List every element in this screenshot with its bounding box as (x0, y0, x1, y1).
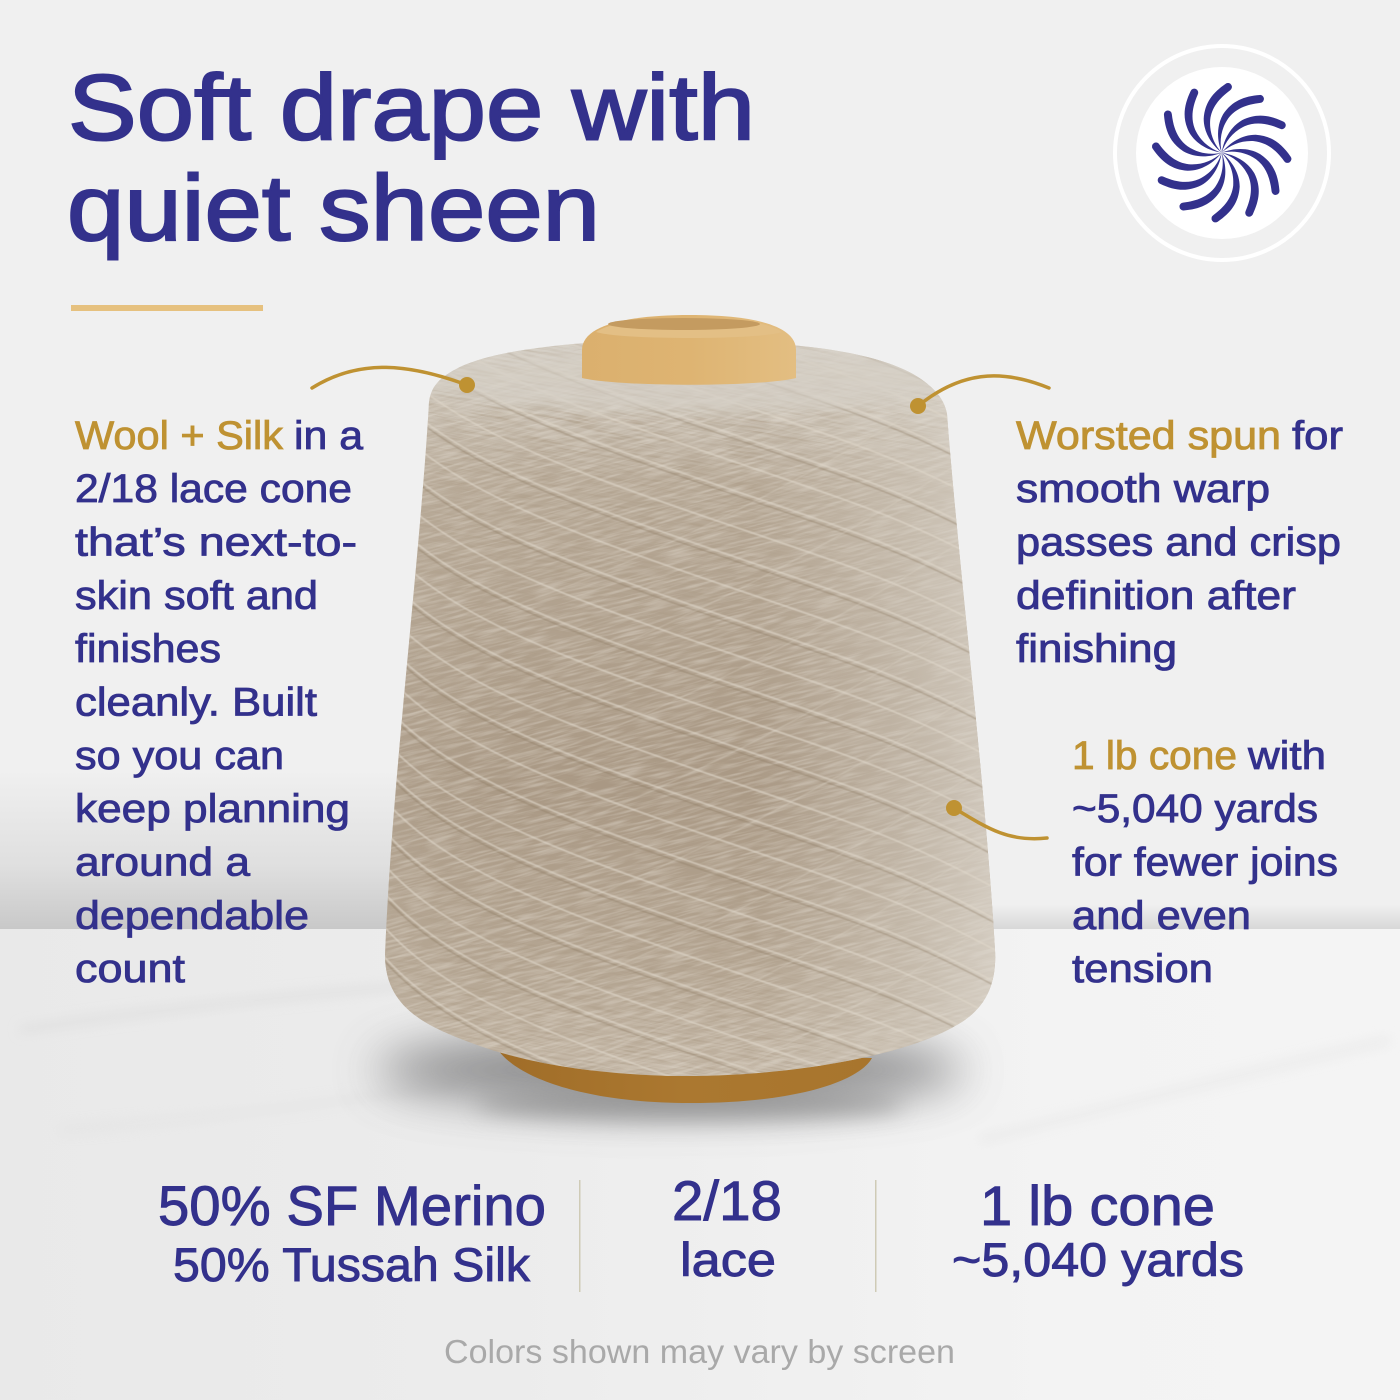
text block: cone weight: 1 lb cone (1072, 734, 1237, 778)
callout: wool and silk (312, 367, 475, 393)
text block: worsted spun (1016, 414, 1343, 671)
text block: cone weight: with (1247, 734, 1326, 778)
text block: fibre description (75, 414, 364, 991)
spec: fibre content: 50% SF Merino (158, 1174, 546, 1237)
text block: fibre description: skin soft and (75, 574, 318, 618)
spec: put-up (952, 1174, 1244, 1286)
spec: yarn weight: lace (680, 1233, 776, 1286)
text block: fibre description: 2/18 lace cone (75, 467, 352, 511)
title (67, 56, 755, 260)
cardboard core base (498, 1050, 872, 1103)
spec: fibre content: 50% Tussah Silk (173, 1238, 531, 1291)
icon: spiral of twelve fibres (1152, 83, 1291, 222)
text block: fibre description: that’s next-to- (75, 521, 357, 565)
text block: worsted spun: Worsted spun (1016, 414, 1281, 458)
spec divider left (579, 1180, 580, 1292)
text block: fibre description: in a (294, 414, 364, 458)
callout: cone weight (946, 800, 1047, 839)
spec: yarn weight: 2/18 (672, 1169, 782, 1232)
cone cast shadow (375, 1034, 965, 1121)
yarn cone product illustration (360, 315, 996, 1142)
text block: worsted spun: passes and crisp (1016, 521, 1341, 565)
text block: cone weight: for fewer joins (1072, 841, 1338, 885)
callout: worsted spun (910, 376, 1049, 414)
spec: put-up: ~5,040 yards (952, 1233, 1244, 1286)
text block: worsted spun: smooth warp (1016, 467, 1270, 511)
text block: fibre description: finishes (75, 627, 221, 671)
title: Soft drape with (68, 56, 755, 160)
cardboard core top (582, 315, 796, 385)
wound yarn body (385, 343, 996, 1076)
text block: cone weight: and even (1072, 894, 1251, 938)
spec: fibre content (158, 1174, 546, 1291)
text block: fibre description: dependable (75, 894, 309, 938)
text block: fibre description: count (75, 947, 185, 991)
title: quiet sheen (67, 156, 600, 260)
text block: fibre description: cleanly. Built (75, 681, 317, 725)
text block: cone weight (1072, 734, 1338, 991)
text block: cone weight: tension (1072, 947, 1213, 991)
spec divider right (875, 1180, 876, 1292)
text block: cone weight: ~5,040 yards (1072, 787, 1318, 831)
text block: worsted spun: for (1292, 414, 1343, 458)
text block: fibre description: around a (75, 841, 251, 885)
text block: worsted spun: finishing (1016, 627, 1177, 671)
text block: fibre description: keep planning (75, 787, 350, 831)
text block: fibre description: so you can (75, 734, 284, 778)
text block: fibre description: Wool + Silk (75, 414, 284, 458)
spec: yarn weight (672, 1169, 782, 1286)
title accent rule (71, 305, 263, 311)
footnote: Colors shown may vary by screen (444, 1333, 955, 1370)
spec: put-up: 1 lb cone (980, 1174, 1215, 1237)
text block: worsted spun: definition after (1016, 574, 1296, 618)
brand logo badge (1115, 46, 1329, 260)
